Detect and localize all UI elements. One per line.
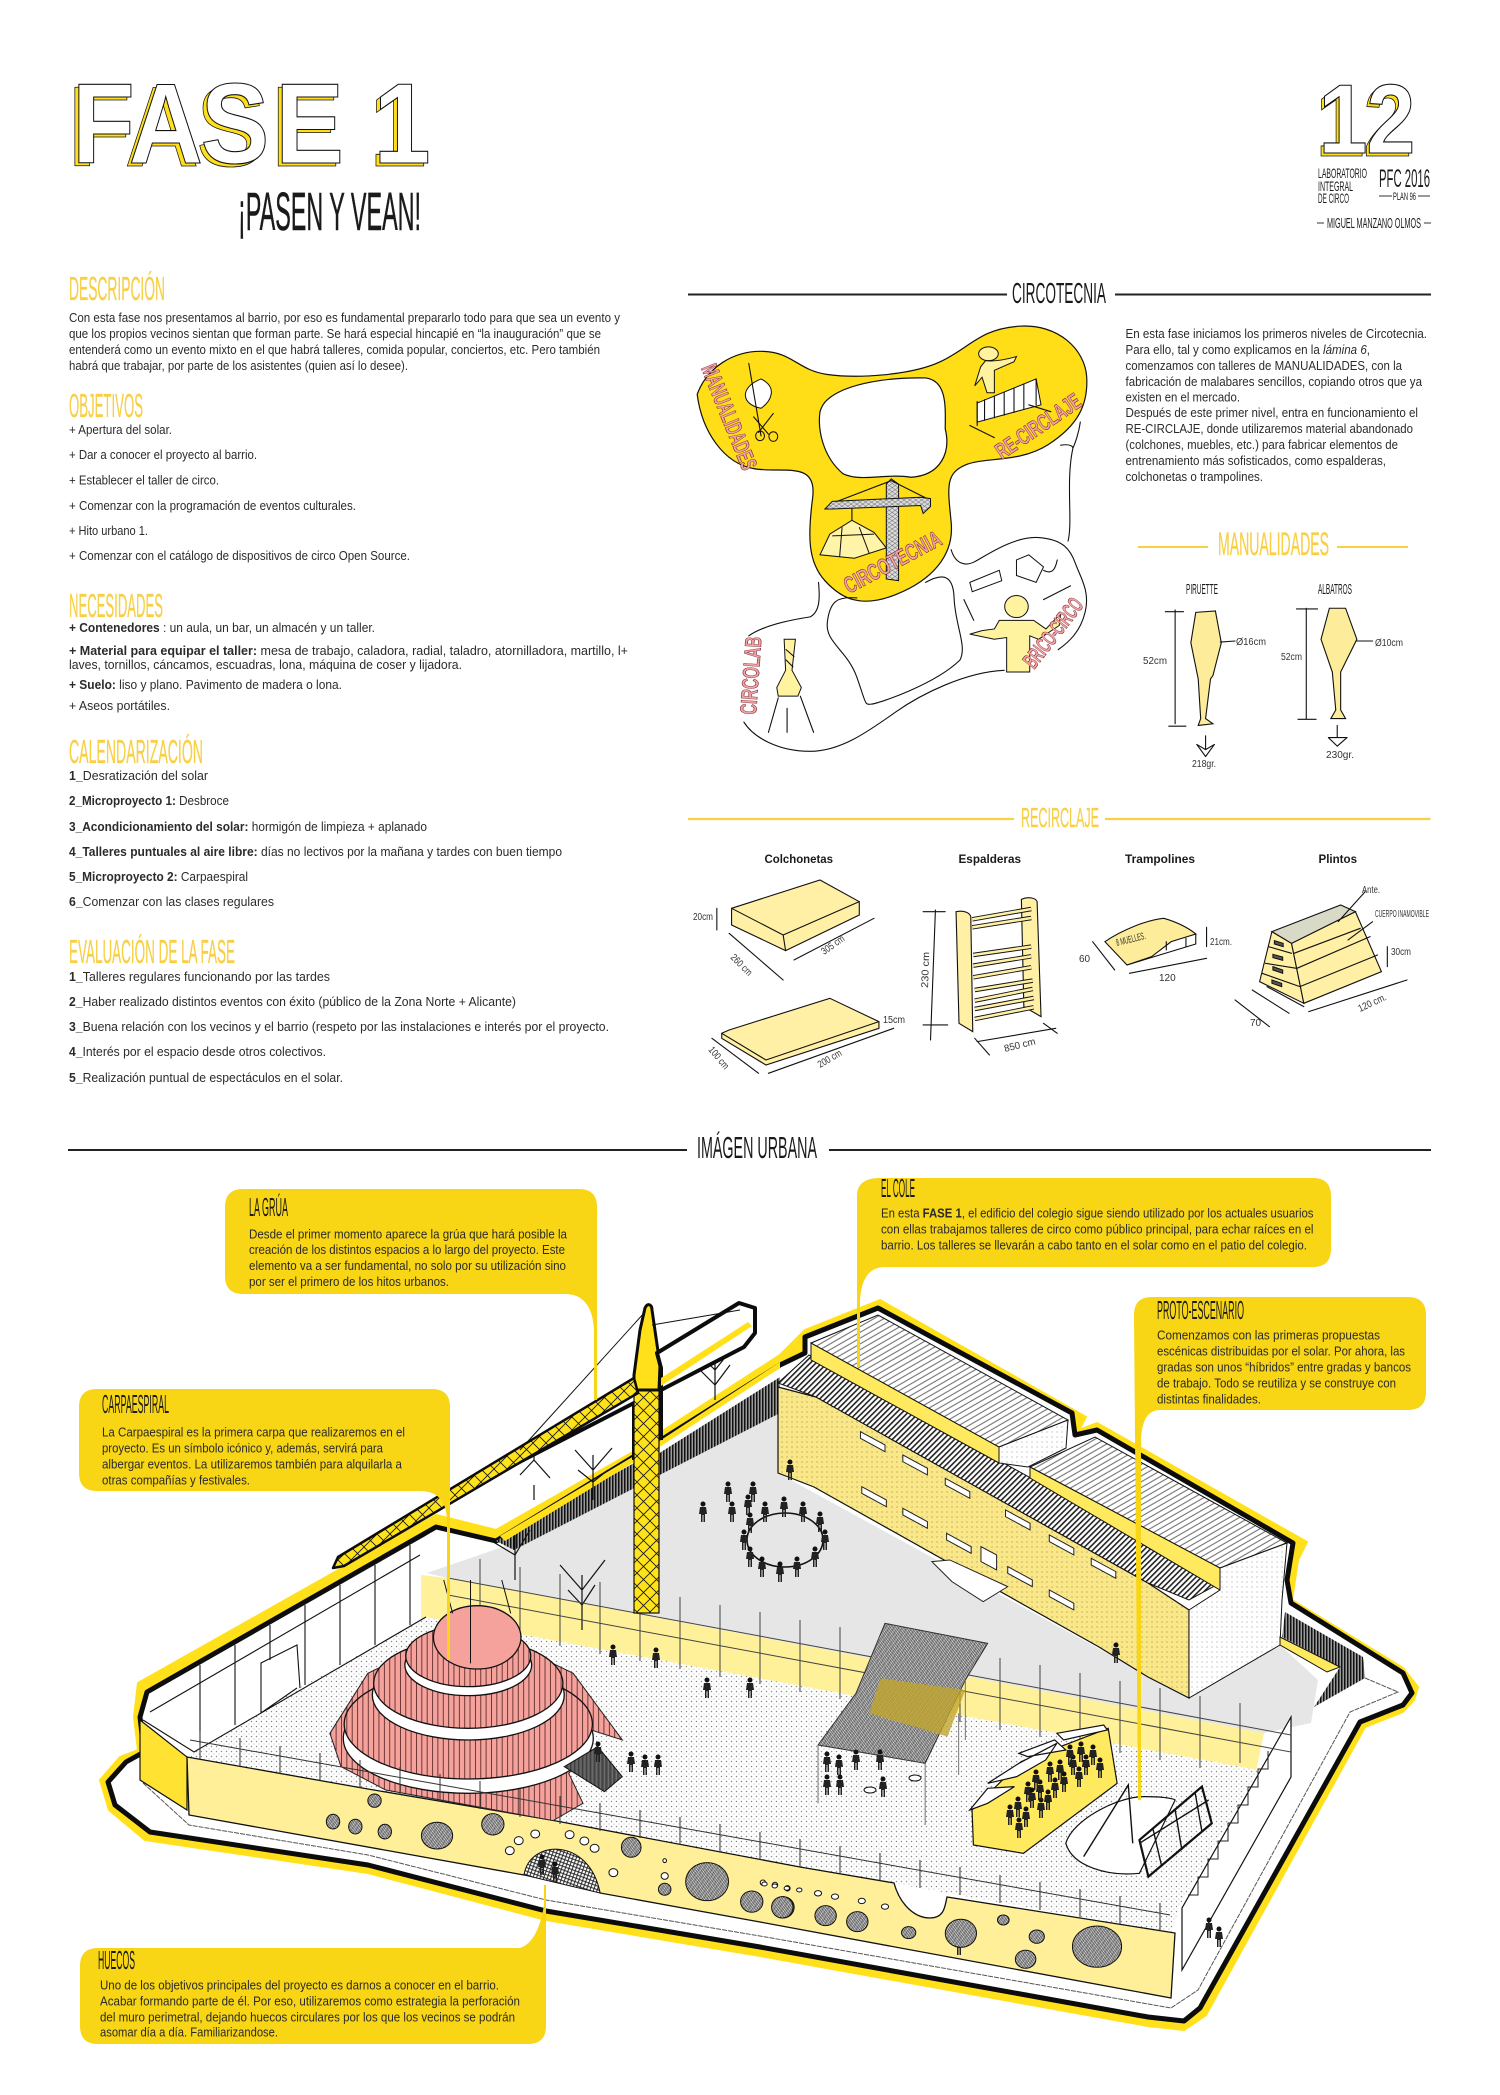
sketch: colchonetas: 305 cm <box>819 934 847 957</box>
section: objetivos: OBJETIVOS <box>69 387 143 424</box>
circle of people in the patio <box>740 1496 829 1582</box>
section: calendarización: 1_Desratización del solar <box>69 769 208 783</box>
text: PFC 2016 <box>1379 165 1430 193</box>
yellow lobes <box>697 326 1087 601</box>
section: objetivos <box>69 387 410 563</box>
sketch: colchonetas: 15cm <box>883 1015 905 1026</box>
sketch: colchonetas: 20cm <box>693 912 713 923</box>
heading: imágen urbana: IMÁGEN URBANA <box>697 1130 817 1165</box>
section: objetivos: + Comenzar con el catálogo de dispositivos de circo Open Source. <box>69 549 410 563</box>
fence along inner band <box>448 1559 1291 1768</box>
heading: manualidades: MANUALIDADES <box>1218 526 1329 562</box>
icon: juggler on barrier <box>970 347 1051 438</box>
section: necesidades: NECESIDADES <box>69 587 163 624</box>
callout: el cole: barrio. Los talleres se llevarán a cabo tanto en el solar como en el patio del colegio. <box>881 1238 1307 1252</box>
project number and credits block: DE CIRCO <box>1318 190 1349 206</box>
section: descripción: habrá que trabajar, por parte de los asistentes (quien así lo desee). <box>69 359 408 373</box>
trees <box>490 1345 735 1630</box>
tower top <box>634 1305 660 1390</box>
lower hatched roof <box>778 1355 1220 1600</box>
callout: el cole: EL COLE <box>881 1173 915 1203</box>
item labels: Espalderas <box>958 854 1021 866</box>
stairs along right wall <box>1188 1751 1268 1895</box>
sketch: pirouette juggling club: 218gr. <box>1192 759 1216 770</box>
outline of white lobes <box>744 422 1087 751</box>
hatched back wall <box>496 1377 780 1550</box>
section: evaluación de la fase: 2_Haber realizado distintos eventos con éxito (público de la Zona Norte + Alicante) <box>69 995 516 1009</box>
section: calendarización <box>69 733 562 909</box>
section: calendarización: 6_Comenzar con las clases regulares <box>69 895 274 909</box>
sketch: plintos: CUERPO INAMOVIBLE <box>1375 909 1429 920</box>
callout: el cole <box>857 1173 1331 1367</box>
section: objetivos: + Hito urbano 1. <box>69 524 148 538</box>
sketch: trampolines: 21cm. <box>1210 937 1232 948</box>
sketch: trampolines: 120 <box>1159 973 1176 984</box>
text: circotecnia description: colchonetas o trampolines. <box>1126 470 1263 484</box>
sketch: plintos: 30cm <box>1391 947 1411 958</box>
people around the tent and patio <box>594 1460 1223 1955</box>
callout: huecos: asomar día a día. Familiarizandose. <box>100 2026 278 2040</box>
left low wall with posts and inner panel <box>143 1535 426 1752</box>
project number and credits block: INTEGRAL <box>1318 178 1353 194</box>
section: evaluación de la fase: 1_Talleres regulares funcionando por las tardes <box>69 970 330 984</box>
icon: crane and tent <box>820 479 931 581</box>
callout: el cole: con ellas trabajamos talleres de circo como público principal, para echar raíces en el <box>881 1222 1314 1236</box>
callout: huecos: HUECOS <box>98 1945 135 1975</box>
section: calendarización: 2_Microproyecto 1: Desbroce <box>69 794 229 808</box>
callout: huecos: del muro perimetral, dejando huecos circulares por los que los vecinos se podrán <box>100 2010 515 2024</box>
counter-jib <box>657 1303 755 1390</box>
label: circotecnia: CIRCOTECNIA <box>839 525 946 598</box>
text: circotecnia description <box>1126 327 1427 484</box>
callout: proto-escenario: gradas son unos “híbridos” entre gradas y bancos <box>1157 1360 1411 1374</box>
text: circotecnia description: fabricación de malabares sencillos, copiando otros que ya <box>1126 375 1422 389</box>
icon: man and tools <box>964 555 1071 672</box>
callout: la grúa: Desde el primer momento aparece la grúa que hará posible la <box>249 1228 567 1242</box>
project number and credits block: LABORATORIO <box>1318 165 1367 181</box>
project number and credits block: PLAN 96 <box>1393 191 1416 203</box>
callout: proto-escenario: PROTO-ESCENARIO <box>1157 1295 1244 1325</box>
yellow inner wall band <box>421 1575 1264 1776</box>
heading: recirclaje: RECIRCLAJE <box>1021 802 1099 833</box>
callout: proto-escenario: Comenzamos con las primeras propuestas <box>1157 1328 1380 1342</box>
sketch: plintos: 70 <box>1250 1018 1262 1029</box>
section: descripción: DESCRIPCIÓN <box>69 270 165 307</box>
section: necesidades: + Aseos portátiles. <box>69 699 170 713</box>
right low wall <box>1182 1717 1291 1970</box>
front perimeter wall <box>187 1757 1175 1998</box>
callout: la grúa: LA GRÚA <box>249 1192 288 1222</box>
crane <box>333 1303 755 1613</box>
icon: juggling ball and scissors <box>745 363 778 441</box>
callout: proto-escenario <box>1134 1295 1426 1800</box>
section: objetivos: + Apertura del solar. <box>69 423 172 437</box>
section: evaluación de la fase <box>69 933 609 1085</box>
facade <box>778 1387 1189 1698</box>
callout: carpaespiral: proyecto. Es un símbolo icónico y, además, servirá para <box>102 1442 383 1456</box>
section: necesidades <box>69 587 628 713</box>
section: calendarización: CALENDARIZACIÓN <box>69 733 203 770</box>
callout: carpaespiral: albergar eventos. La utilizaremos también para alquilarla a <box>102 1458 402 1472</box>
callout: proto-escenario: de trabajo. Todo se reutiliza y se construye con <box>1157 1376 1396 1390</box>
sketch: pirouette juggling club <box>1143 581 1266 770</box>
sketch: albatros juggling club: 52cm <box>1281 652 1302 663</box>
callout: huecos <box>80 1885 546 2044</box>
end wall yellow <box>140 1720 187 1810</box>
callout: la grúa <box>225 1189 597 1400</box>
text: circotecnia description: comenzamos con talleres de MANUALIDADES, con la <box>1126 359 1402 373</box>
callout: el cole: En esta FASE 1, el edificio del colegio sigue siendo utilizado por los actuales usuarios <box>881 1206 1314 1220</box>
section: calendarización: 5_Microproyecto 2: Carpaespiral <box>69 870 248 884</box>
sketch: plintos: Ante. <box>1362 885 1380 896</box>
bleachers: proto-stage <box>970 1725 1117 1853</box>
callout: huecos: Uno de los objetivos principales del proyecto es darnos a conocer en el barrio. <box>100 1978 499 1992</box>
sketch: albatros juggling club: Ø10cm <box>1375 638 1403 649</box>
jib <box>333 1378 638 1568</box>
project number and credits block: 12 <box>1319 65 1415 174</box>
central white hole <box>819 378 947 478</box>
callout: la grúa: creación de los distintos espacios a lo largo del proyecto. Este <box>249 1243 565 1257</box>
diagram: circotecnia blob <box>697 326 1087 751</box>
crane cables <box>520 1310 740 1450</box>
section: descripción: Con esta fase nos presentamos al barrio, por eso es fundamental prepararlo todo para que sea un evento y <box>69 311 621 325</box>
mast <box>634 1377 659 1613</box>
label: manualidades: MANUALIDADES <box>696 360 762 474</box>
sketch: pirouette juggling club: PIRUETTE <box>1186 581 1218 598</box>
arch opening with two figures <box>524 1849 600 1893</box>
sketch: albatros juggling club: 230gr. <box>1326 750 1354 761</box>
section: calendarización: 4_Talleres puntuales al aire libre: días no lectivos por la mañana y tardes con buen tiempo <box>69 845 562 859</box>
text: circotecnia description: existen en el mercado. <box>1126 390 1240 404</box>
callout: proto-escenario: escénicas distribuidas por el solar. Por ahora, las <box>1157 1344 1405 1358</box>
callout: carpaespiral: La Carpaespiral es la primera carpa que realizaremos en el <box>102 1426 405 1440</box>
section: objetivos: + Dar a conocer el proyecto al barrio. <box>69 448 257 462</box>
site outline: black contour <box>108 1308 1412 2021</box>
sketch: colchonetas <box>693 880 905 1073</box>
label: circolab: CIRCOLAB <box>735 636 766 715</box>
roof block two <box>1030 1437 1287 1568</box>
sketch: trampolines: 8 MUELLES. <box>1115 931 1147 949</box>
callout: la grúa: elemento va a ser fundamental, no solo por su utilización sino <box>249 1259 566 1273</box>
site outline: yellow halo <box>100 1300 1418 2030</box>
section: descripción: entenderá como un evento mixto en el que habrá talleres, comida popular, conciertos, etc. Pero también <box>69 343 600 357</box>
text: ¡PASEN Y VEAN! <box>238 182 421 242</box>
callout: proto-escenario: distintas finalidades. <box>1157 1392 1261 1406</box>
text: circotecnia description: entrenamiento más sofisticados, como espalderas, <box>1126 454 1386 468</box>
sketch: espalderas: 850 cm <box>1003 1036 1037 1055</box>
yellow strip on back wall <box>500 1362 780 1541</box>
sketch: espalderas <box>920 898 1057 1055</box>
callout: huecos: Acabar formando parte de él. Por eso, utilizaremos como estrategia la perforación <box>100 1994 520 2008</box>
item labels: Trampolines <box>1125 854 1195 866</box>
section: evaluación de la fase: 3_Buena relación con los vecinos y el barrio (respeto por las instalaciones e interés por el proyecto. <box>69 1020 609 1034</box>
text: circotecnia description: En esta fase iniciamos los primeros niveles de Circotecnia. <box>1126 327 1427 341</box>
text: circotecnia description: Para ello, tal y como explicamos en la lámina 6, <box>1126 343 1370 357</box>
section: necesidades: laves, tornillos, cáncamos, escuadras, lona, máquina de coser y lijadora. <box>69 658 462 672</box>
sketch: trampolines: 60 <box>1079 954 1091 965</box>
sketch: pirouette juggling club: 52cm <box>1143 656 1167 667</box>
sketch: espalderas: 230 cm <box>920 952 932 988</box>
text: circotecnia description: RE-CIRCLAJE, donde utilizaremos material abandonado <box>1126 422 1413 436</box>
tables with people <box>823 1750 921 1797</box>
roof block one <box>811 1315 1068 1447</box>
text: circotecnia description: (colchones, muebles, etc.) para fabricar elementos de <box>1126 438 1398 452</box>
callout: carpaespiral: CARPAESPIRAL <box>102 1389 169 1419</box>
building: school <box>778 1315 1365 1707</box>
wall holes <box>326 1794 794 1918</box>
section: necesidades: + Material para equipar el taller: mesa de trabajo, caladora, radial, taladro, atornilladora, martillo, l+ <box>69 644 628 658</box>
section: evaluación de la fase: 5_Realización puntual de espectáculos en el solar. <box>69 1071 343 1085</box>
sketch: colchonetas: 200 cm <box>816 1048 844 1071</box>
tent: carpaespiral <box>330 1580 622 1821</box>
section: calendarización: 3_Acondicionamiento del solar: hormigón de limpieza + aplanado <box>69 820 427 834</box>
stippled pavement <box>187 1617 1258 1933</box>
section: evaluación de la fase: EVALUACIÓN DE LA FASE <box>69 933 235 970</box>
patio: grey ground <box>427 1395 1318 1733</box>
black wall lines <box>455 1383 661 1497</box>
callout: carpaespiral: otras compañías y festivales. <box>102 1474 250 1488</box>
section: necesidades: + Suelo: liso y plano. Pavimento de madera o lona. <box>69 678 342 692</box>
shade net <box>818 1623 988 1825</box>
hatched wall at right <box>1282 1612 1365 1707</box>
sketch: pirouette juggling club: Ø16cm <box>1236 637 1266 648</box>
axonometric drawing: urban image <box>100 1300 1418 2030</box>
section: necesidades: + Contenedores : un aula, un bar, un almacén y un taller. <box>69 621 375 635</box>
fence along front wall <box>190 1731 1170 1931</box>
section: descripción: que los propios vecinos sientan que forman parte. Se hará especial hincapié en “la inauguración” que se <box>69 327 601 341</box>
sketch: trampolines <box>1079 918 1232 984</box>
item labels <box>764 854 1357 866</box>
icon: juggling club and person <box>768 639 814 732</box>
heading: circotecnia: CIRCOTECNIA <box>1012 278 1106 310</box>
section: objetivos: + Comenzar con la programación de eventos culturales. <box>69 499 356 513</box>
text: circotecnia description: Después de este primer nivel, entra en funcionamiento el <box>1126 406 1418 420</box>
item labels: Plintos <box>1318 854 1357 866</box>
item labels: Colchonetas <box>764 854 833 866</box>
title: FASE 1: FASE 1 <box>0 60 431 187</box>
stage with frame <box>1066 1785 1212 1877</box>
section: objetivos: + Establecer el taller de circo. <box>69 474 219 488</box>
section: descripción <box>69 270 621 373</box>
label: re-circlaje: RE-CIRCLAJE <box>990 388 1086 464</box>
windows <box>860 1432 1116 1610</box>
sketch: colchonetas: 100 cm <box>706 1045 731 1072</box>
section: evaluación de la fase: 4_Interés por el espacio desde otros colectivos. <box>69 1045 326 1059</box>
sketch: colchonetas: 260 cm <box>728 952 754 979</box>
sketch: albatros juggling club: ALBATROS <box>1318 581 1352 598</box>
sketch: plintos <box>1235 885 1429 1029</box>
project number and credits block <box>1316 65 1431 232</box>
label: brico-circo: BRICO-CIRCO <box>1017 592 1088 673</box>
project number and credits block: 12 <box>1316 68 1412 177</box>
callout: carpaespiral <box>79 1389 450 1660</box>
title: FASE 1: FASE 1 <box>0 63 427 190</box>
thin ring <box>143 1678 1398 2008</box>
callout: la grúa: por ser el primero de los hitos urbanos. <box>249 1275 449 1289</box>
sketch: albatros juggling club <box>1281 581 1403 761</box>
sketch: plintos: 120 cm. <box>1357 992 1388 1015</box>
